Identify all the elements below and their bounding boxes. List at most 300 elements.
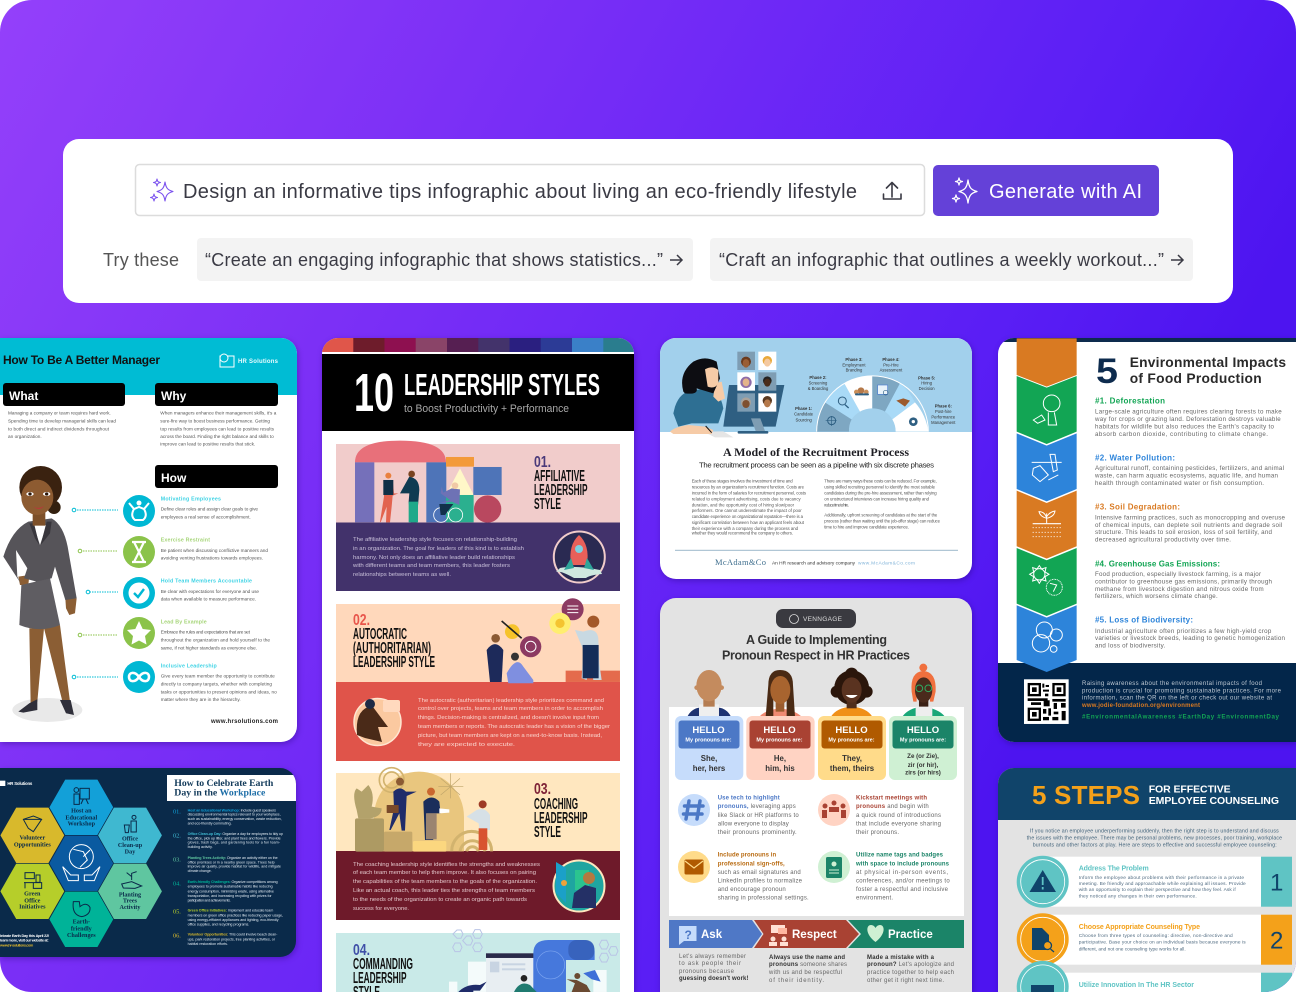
call to action text: Always use the name and bbox=[769, 955, 845, 961]
badge: they: them, theirs bbox=[830, 764, 875, 773]
body column 1: whether they would recommend the company to others. bbox=[692, 530, 793, 536]
tip: tech bbox=[678, 794, 799, 836]
impact 5: varieties or livestock breeds, leading to genetic homogenization bbox=[1095, 635, 1286, 642]
step 2: 2 bbox=[1270, 928, 1283, 954]
section: How: How bbox=[161, 471, 187, 485]
icon: people with flag bbox=[769, 925, 788, 946]
body column 1: Each of these stages involves the investment of time and bbox=[692, 478, 793, 483]
list items: discussing environmental topics relevant to your workplace, bbox=[188, 813, 281, 817]
heading bbox=[1096, 352, 1286, 391]
panel: How to Celebrate Earth Day in the Workplace bbox=[0, 768, 296, 957]
phase labels: Management bbox=[931, 420, 956, 425]
badge: she: She, bbox=[701, 754, 717, 763]
style 04: Commanding bbox=[336, 930, 620, 992]
tip: Inclusive Leadership: directly to company targets, whether with completing bbox=[161, 682, 272, 686]
icon: upload bbox=[884, 182, 901, 199]
list numbers: 02. bbox=[173, 833, 181, 840]
list items: such as sustainability, energy conservation, waste reduction, bbox=[188, 817, 282, 821]
step 1 bbox=[1017, 856, 1292, 908]
step 1: meeting. Be friendly and approachable while explaining all issues. Provide bbox=[1079, 881, 1246, 887]
hexagon labels: Challenges bbox=[67, 933, 96, 939]
list numbers: 04. bbox=[173, 881, 181, 888]
title: STYLE bbox=[534, 496, 561, 513]
body text: The autocratic (authoritarian) leadership style prioritizes command and bbox=[418, 698, 604, 704]
call to action text bbox=[679, 954, 954, 984]
impact 3: decreased agricultural productivity over time. bbox=[1095, 536, 1231, 544]
tip: Exercise Restraint: Be patient when discussing conflictive manners and bbox=[161, 548, 268, 553]
footer: McAdam&Co bbox=[715, 557, 766, 567]
tip: Motivating Employees: employees a real sense of accomplishment. bbox=[161, 514, 251, 520]
impact 1: habitats for wildlife but also reduces the Earth's capacity to bbox=[1095, 424, 1275, 430]
section: What: What bbox=[9, 389, 38, 403]
call to action text: to ask people their bbox=[679, 961, 741, 967]
call to action text: Let's always remember bbox=[679, 954, 746, 960]
badge: they: They, bbox=[842, 754, 862, 763]
intro text: the issues with the employee. There may be personal problems, new processes, poor training, workplace bbox=[1027, 836, 1282, 842]
icon: desk bbox=[24, 873, 42, 888]
section: What: Managing a company or team requires hard work. bbox=[8, 410, 111, 416]
tip: sign-offs: LinkedIn profiles to normalize bbox=[718, 878, 803, 884]
tip: name tags: environment. bbox=[856, 896, 893, 902]
body column 1: performers. One cannot underestimate the impact of poor bbox=[692, 508, 802, 513]
title: 02. bbox=[353, 612, 370, 629]
tip: Motivating Employees: Motivating Employees bbox=[161, 496, 221, 502]
tip: tech: pronouns, leveraging apps bbox=[718, 804, 796, 810]
body text: The coaching leadership style identifies the strengths and weaknesses bbox=[353, 862, 540, 868]
impact 2 bbox=[1094, 454, 1284, 487]
title band: LEADERSHIP STYLES bbox=[404, 368, 600, 402]
panel: 5 Steps for Effective Employee Counseling bbox=[998, 768, 1296, 992]
suggestion chip 1 bbox=[197, 238, 693, 281]
title: 04. bbox=[353, 942, 370, 959]
prompt input box bbox=[136, 164, 924, 216]
hexagon labels: Office bbox=[122, 836, 138, 842]
step 1: they noticed any changes in their own performance. bbox=[1079, 894, 1197, 900]
impact 3 bbox=[1095, 502, 1286, 544]
body column 2: using skilled recruiting personnel to identify the most suitable bbox=[824, 484, 936, 489]
tip: sign-offs: and encourage pronoun bbox=[718, 887, 786, 893]
icon: flexed arm bbox=[73, 902, 90, 917]
list items: energy consumption, minimizing waste, using alternative bbox=[188, 889, 274, 893]
hexagon diagram bbox=[0, 779, 162, 947]
icon: planting hand bbox=[122, 872, 142, 888]
phase labels: Phase 3: bbox=[845, 357, 863, 362]
body text bbox=[352, 537, 524, 578]
panel: AI prompt bbox=[63, 139, 1233, 303]
impact 3: structure. This leads to soil erosion, loss of soil fertility, and bbox=[1095, 529, 1273, 536]
body column 1: resources by an organization's recruitment function. Costs are bbox=[692, 484, 805, 489]
heading bbox=[1032, 780, 1279, 810]
list numbers: 05. bbox=[173, 909, 181, 916]
body text: relationships between teams as well. bbox=[353, 572, 451, 578]
logo: HR Solutions bbox=[220, 354, 279, 367]
step 2: Choose Appropriate Counseling Type bbox=[1079, 924, 1200, 931]
phase labels: Pre-Hire bbox=[883, 362, 899, 367]
impact 1 bbox=[1094, 396, 1282, 438]
title: 03. bbox=[534, 781, 551, 798]
phase labels: Phase 5: bbox=[918, 375, 935, 380]
body text: in an organization. The goal for leaders of this kind is to establish bbox=[353, 546, 524, 552]
suggestion chip 2 bbox=[710, 238, 1193, 281]
impact 1: absorb carbon dioxide, contributing to climate change. bbox=[1095, 431, 1268, 438]
hexagon labels: Day bbox=[125, 849, 136, 855]
list items: the office, pick up litter, and plant trees and flowers. Provide bbox=[188, 836, 281, 840]
heading: EMPLOYEE COUNSELING bbox=[1149, 795, 1279, 807]
list items: participation and achievements. bbox=[188, 898, 231, 902]
tip: name tags: with space to include pronouns bbox=[855, 862, 950, 868]
subheading: The recruitment process can be seen as a pipeline with six discrete phases bbox=[699, 460, 934, 470]
call to action text: of their identity. bbox=[769, 978, 824, 984]
tip: Inclusive Leadership: Inclusive Leadership bbox=[161, 664, 217, 670]
tip: name tags bbox=[818, 851, 950, 902]
badge: they bbox=[818, 716, 886, 780]
body text: team members or reports. The autocratic leader has a vision of the bigger bbox=[418, 724, 610, 730]
icon: biodiversity bubbles bbox=[1032, 622, 1062, 652]
tip: tech: Use tech to highlight bbox=[718, 796, 780, 802]
hexagon labels: Host an bbox=[71, 809, 92, 815]
tip: meetings: a quick round of introductions bbox=[856, 813, 941, 819]
call to action text: guessing doesn't work! bbox=[679, 976, 748, 982]
body column 2 bbox=[824, 478, 941, 530]
tip: name tags: foster a respectful and inclusive bbox=[856, 887, 949, 893]
badge: ze: HELLO bbox=[907, 725, 939, 736]
call to action bbox=[0, 934, 49, 947]
body text: success for everyone. bbox=[353, 906, 409, 912]
hexagon labels: Initiatives bbox=[19, 904, 46, 910]
body text: harmony. Not only does an affiliative leader build relationships bbox=[353, 555, 515, 561]
step 2: Choose from three types of counseling: directive, non-directive and bbox=[1079, 933, 1233, 939]
body text: The affiliative leadership style focuses on relationship-building bbox=[353, 537, 517, 543]
section: How bbox=[155, 465, 278, 488]
title: STYLE bbox=[534, 824, 561, 841]
title box bbox=[167, 775, 296, 801]
title: 01. bbox=[534, 454, 551, 471]
heading: 5 STEPS bbox=[1032, 780, 1140, 810]
footer note: #EnvironmentalAwareness #EarthDay #EnvironmentDay bbox=[1082, 714, 1280, 720]
impact 4: fertilizers, which worsens climate change. bbox=[1095, 593, 1218, 600]
heading: Environmental Impacts bbox=[1130, 355, 1286, 370]
suggestion chip 1: “Create an engaging infographic that shows statistics...” bbox=[205, 250, 663, 270]
list items: members on green office practices like reducing paper usage, bbox=[188, 913, 283, 917]
badge: they: HELLO bbox=[835, 725, 868, 736]
suggestion chip 2: “Craft an infographic that outlines a weekly workout...” bbox=[719, 250, 1164, 270]
badge: he: My pronouns are: bbox=[756, 738, 803, 744]
title band: to Boost Productivity + Performance bbox=[404, 403, 569, 415]
section: What bbox=[3, 383, 125, 439]
badge: she: My pronouns are: bbox=[685, 738, 732, 744]
list items: office premises or in a nearby green space. Trees help bbox=[188, 860, 275, 864]
body text bbox=[353, 862, 540, 912]
call to action text: with us and be respectful bbox=[768, 970, 842, 976]
title bbox=[534, 783, 588, 837]
heading: FOR EFFECTIVE bbox=[1149, 784, 1231, 796]
phase labels: Post-hire bbox=[935, 409, 952, 414]
icon: heart bbox=[867, 925, 884, 942]
website: www.hrsolutions.com bbox=[210, 719, 278, 725]
badge: ze: zir (or hir), bbox=[908, 762, 939, 769]
section: Why bbox=[155, 383, 278, 446]
tip: name tags: at physical in-person events, bbox=[856, 870, 948, 876]
list items: gloves, trash bags, and gardening tools for a fun team- bbox=[188, 841, 281, 845]
list items: climate change. bbox=[188, 869, 212, 873]
body column 1: duration, and the opportunity cost of hiring slow/poor bbox=[692, 502, 795, 507]
intro text bbox=[1027, 828, 1282, 848]
badge: ze: zirs (or hirs) bbox=[905, 770, 941, 776]
tip: Exercise Restraint: Exercise Restraint bbox=[161, 538, 210, 544]
tip: meetings: their pronouns. bbox=[856, 830, 899, 836]
tip: sign-offs: such as email signatures and bbox=[718, 870, 801, 876]
heading: How To Be A Better Manager bbox=[3, 353, 160, 367]
phase labels: Screening bbox=[809, 381, 828, 386]
panel: Pronoun Respect guide bbox=[660, 598, 972, 992]
colour stripe bbox=[322, 338, 634, 352]
title: LEADERSHIP bbox=[534, 482, 588, 499]
tip: Exercise Restraint bbox=[78, 536, 268, 568]
impact 5 bbox=[1095, 616, 1286, 650]
panel: A Model of the Recruitment Process bbox=[660, 338, 972, 579]
badge: ze: Ze (or Zie), bbox=[907, 753, 939, 760]
body column 1: significant correlation between how an applicant feels about bbox=[692, 520, 805, 525]
badge: they: My pronouns are: bbox=[828, 738, 875, 744]
tip: Hold Team Members Accountable: Hold Team Members Accountable bbox=[161, 578, 252, 584]
badge: he: him, his bbox=[765, 764, 795, 773]
illustration: mentor scene bbox=[354, 768, 492, 852]
body text: of each team member to help them improve. It also focuses on pairing bbox=[353, 870, 536, 876]
icon: sparkle bbox=[150, 179, 173, 201]
heading: Pronoun Respect in HR Practices bbox=[722, 648, 910, 662]
try these label: Try these bbox=[103, 250, 179, 270]
prompt text: Design an informative tips infographic about living an eco-friendly lifestyle bbox=[183, 181, 857, 203]
list items: Planting Trees Activity: Organize an activity either on the bbox=[188, 856, 278, 860]
hexagon labels: Workshop bbox=[68, 822, 96, 828]
impact 4: Food production, especially livestock farming, is a major bbox=[1095, 571, 1261, 578]
hexagon labels: friendly bbox=[71, 927, 93, 933]
name badges bbox=[675, 716, 957, 780]
phase labels: Phase 1: bbox=[795, 406, 812, 411]
title bbox=[353, 614, 435, 667]
illustration: blueprint scene bbox=[449, 930, 618, 992]
impact 2: #2. Water Pollution: bbox=[1095, 454, 1175, 462]
title bbox=[534, 456, 588, 509]
body column 2: Additionally, upfront screening of candidates at the start of the bbox=[824, 512, 938, 518]
tip: Lead By Example: same, if not higher standards as everyone else. bbox=[161, 646, 257, 650]
body column 2: process (rather than waiting until the job-offer stage) can reduce bbox=[824, 518, 941, 524]
body column 2: There are many ways these costs can be reduced. For example, bbox=[824, 478, 937, 483]
title: LEADERSHIP bbox=[353, 970, 407, 987]
footer: An HR research and advisory company bbox=[772, 560, 856, 566]
panel: How To Be A Better Manager bbox=[0, 338, 297, 742]
step 2: different, and not one counseling type works for all. bbox=[1079, 946, 1186, 952]
tip: Lead By Example: throughout the organization and hold yourself to the bbox=[161, 638, 270, 642]
panel: 10 Leadership Styles bbox=[322, 338, 634, 992]
badge: Venngage bbox=[776, 609, 856, 628]
body column 2: time to hire and improve candidate experience. bbox=[824, 524, 909, 530]
list items: Earth-friendly Challenges: Organize competitions among bbox=[188, 880, 278, 884]
step 1: Address The Problem bbox=[1079, 866, 1149, 873]
body column 1: candidate experience on organizational reputation—there is a bbox=[692, 514, 804, 519]
phase labels: Performance bbox=[931, 415, 956, 420]
chart: recruitment pipeline half donut bbox=[794, 357, 956, 432]
body text: with different teams and team members, this leader fosters bbox=[352, 563, 510, 569]
impact 1: #1. Deforestation bbox=[1095, 396, 1165, 406]
list numbers: 06. bbox=[173, 933, 181, 940]
impact 5: and loss of biodiversity. bbox=[1095, 642, 1166, 650]
section: What: Spending time to develop managerial skills can lead bbox=[8, 418, 116, 424]
impact 2: health through contaminated water or fish consumption. bbox=[1095, 480, 1264, 487]
style 01: Affiliative bbox=[336, 441, 620, 591]
list items bbox=[188, 808, 283, 946]
hexagon labels bbox=[14, 809, 143, 939]
call to action: www.hr-solutions.com bbox=[0, 943, 34, 947]
tip: Exercise Restraint: avoiding venting frustrations towards employees. bbox=[161, 556, 263, 560]
list items: ups, park restoration projects, tree planting activities, or bbox=[188, 937, 276, 941]
tip: Inclusive Leadership: matter where they are in the hierarchy. bbox=[161, 697, 241, 702]
list numbers bbox=[173, 808, 181, 940]
phase labels: Candidate bbox=[794, 412, 814, 417]
impact 3: #3. Soil Degradation: bbox=[1095, 502, 1180, 512]
illustration: shapes and people bbox=[355, 441, 502, 523]
tip: Lead By Example: Embrace the rules and expectations that are set bbox=[161, 630, 251, 634]
body text: Like an actual coach, this leader ties the strengths of team members bbox=[353, 888, 535, 894]
step 2 bbox=[1017, 913, 1292, 965]
hexagon labels: Green bbox=[24, 892, 41, 898]
tip: Motivating Employees: Define clear roles and assign clear goals to give bbox=[161, 506, 258, 512]
body column 1: their experience with a company during the process and bbox=[692, 526, 799, 531]
step 3 bbox=[1017, 961, 1292, 992]
tip: meetings bbox=[818, 794, 941, 836]
tip: meetings: that include everyone sharing bbox=[856, 822, 941, 828]
tip: Inclusive Leadership: Give every team member the opportunity to contribute bbox=[161, 674, 275, 678]
impact 4: #4. Greenhouse Gas Emissions: bbox=[1095, 560, 1220, 568]
QR code bbox=[1024, 679, 1069, 724]
title: COACHING bbox=[534, 796, 578, 813]
body column 2: on unstructured interviews can increase hiring quality and bbox=[824, 496, 930, 501]
list items: building activity. bbox=[188, 845, 213, 849]
badge: he: He, bbox=[774, 754, 786, 763]
title: LEADERSHIP STYLE bbox=[353, 654, 435, 671]
body column 2: reduce time to hire. bbox=[824, 502, 849, 507]
body text: the capabilities of the team members to the goals of the organization. bbox=[353, 879, 537, 885]
logo: HR Solutions: HR Solutions bbox=[7, 781, 33, 786]
section: Why: sure-fire way to boost business performance. Getting bbox=[160, 418, 270, 424]
body text: things. Decision-making is centralized, and doesn't involve input from bbox=[418, 715, 599, 721]
section: Why: across the board. Finding the right balance and skills to bbox=[160, 434, 274, 439]
icon: sparkle white bbox=[952, 178, 977, 203]
impact 5: Industrial agriculture often prioritizes a few high-yield crop bbox=[1095, 628, 1272, 635]
title band bbox=[322, 354, 634, 431]
chevron column with icons bbox=[1017, 338, 1077, 672]
tip: tech: allow everyone to display bbox=[718, 822, 789, 828]
illustration: four people bbox=[687, 664, 945, 717]
impact 4: contributor to greenhouse gas emissions, primarily through bbox=[1095, 578, 1273, 586]
body column 1: incurred in the form of salaries for recruitment personnel, costs bbox=[692, 490, 806, 495]
list numbers: 01. bbox=[173, 808, 181, 815]
badge: leader bbox=[354, 698, 401, 746]
call to action text: other get it right next time. bbox=[867, 978, 944, 984]
heading bbox=[722, 633, 910, 662]
footer note: Raising awareness about the environmental impacts of food bbox=[1082, 681, 1262, 687]
tip: name tags: conferences, and/or meetings to bbox=[856, 878, 950, 884]
tip: Inclusive Leadership: tasks or opportunities to present opinions and ideas, no bbox=[161, 690, 277, 694]
impact 4: methane from livestock digestion and nitrous oxide from bbox=[1095, 586, 1264, 593]
title bbox=[353, 942, 413, 992]
tip: Hold Team Members Accountable: Be clear with expectations for everyone and use bbox=[161, 589, 259, 594]
badge: she: her, hers bbox=[693, 764, 726, 773]
call to action text: pronoun? Let's apologize and bbox=[867, 962, 954, 968]
list numbers: 03. bbox=[173, 856, 181, 863]
tip: Lead By Example: Lead By Example bbox=[161, 620, 207, 626]
badge: rocket bbox=[554, 532, 605, 582]
tip: Inclusive Leadership bbox=[72, 661, 277, 702]
phase labels: Assessment bbox=[880, 368, 903, 373]
badge: ze: My pronouns are: bbox=[900, 738, 946, 744]
badge: she: HELLO bbox=[692, 725, 725, 736]
phase labels: & Boarding bbox=[808, 386, 829, 391]
banner: Ask Respect Practice bbox=[669, 920, 964, 948]
tip: meetings: pronouns and begin with bbox=[856, 804, 929, 810]
tip: Hold Team Members Accountable: data when available to measure performance. bbox=[161, 596, 256, 602]
heading: 5 bbox=[1096, 352, 1118, 391]
list items: transportation, and increasing recycling with prizes for bbox=[188, 894, 272, 898]
title box: How to Celebrate Earth bbox=[174, 778, 274, 789]
impact 1: way for crops or grazing land. Deforestation destroys valuable bbox=[1094, 416, 1281, 423]
icon: polluted water bbox=[1032, 454, 1062, 482]
intro text: burnouts and other factors at play. Here are steps to effective and successful employee counseling: bbox=[1033, 842, 1277, 848]
call to action text: pronouns someone shares bbox=[769, 962, 847, 968]
title box: Day in the Workplace bbox=[174, 788, 266, 799]
list items: Green Office Initiatives: Implement and educate team bbox=[188, 909, 273, 913]
body column 1: related to employment advertising, costs due to vacancy bbox=[692, 496, 802, 501]
badge: she bbox=[675, 716, 743, 780]
step 2: participative. Base your choice on an individual basis because everyone is bbox=[1079, 940, 1246, 946]
footer bbox=[675, 550, 958, 567]
section: Why: When managers enhance their management skills, it's a bbox=[160, 410, 277, 416]
icon: globe in hands bbox=[63, 845, 100, 881]
tip: sign-offs: Include pronouns in bbox=[718, 852, 777, 858]
banner: Ask Respect Practice: Respect bbox=[792, 929, 837, 941]
body column 2: candidates during the pre-hire assessment, rather than relying bbox=[824, 490, 937, 495]
phase labels: Hiring bbox=[921, 381, 933, 386]
tip: Hold Team Members Accountable bbox=[86, 577, 259, 609]
badge: presenter bbox=[554, 860, 604, 912]
intro text: If you notice an employee underperforming suddenly, then the right step is to understand and discuss bbox=[1030, 828, 1279, 834]
title: AUTOCRATIC bbox=[353, 626, 407, 643]
panel: Environmental Impacts of Food Production bbox=[998, 338, 1296, 742]
hexagon labels: Planting bbox=[119, 892, 142, 898]
step 1: 1 bbox=[1270, 870, 1283, 897]
call to action text: Made a mistake with a bbox=[867, 955, 935, 961]
icon: tree and axe bbox=[1033, 395, 1060, 425]
hexagon labels: Earth- bbox=[73, 920, 90, 926]
icon: question bubble bbox=[679, 926, 696, 945]
hexagon labels: Volunteer bbox=[19, 836, 45, 842]
list items: habitat restoration efforts. bbox=[188, 942, 228, 946]
title: LEADERSHIP bbox=[534, 810, 588, 827]
illustration: woman on video call bbox=[670, 352, 784, 437]
generate button: Generate with AI bbox=[989, 181, 1142, 203]
hexagon labels: Trees bbox=[123, 899, 138, 905]
body text: they are expected to execute. bbox=[418, 742, 515, 748]
list items: employees to promote sustainable habits like reducing bbox=[188, 885, 273, 889]
impact 2: waste, can harm aquatic ecosystems, aquatic life, and human bbox=[1094, 472, 1279, 480]
body column 1 bbox=[692, 478, 806, 536]
impact 2: Agricultural runoff, containing pesticides, fertilizers, and animal bbox=[1095, 465, 1284, 472]
illustration: businesswoman bbox=[3, 466, 82, 722]
section: Why: improve can lead to positive results that stick. bbox=[160, 442, 255, 446]
phase labels: Phase 4: bbox=[882, 357, 900, 362]
list items: and eco-friendly commuting. bbox=[188, 821, 232, 825]
phase labels: Branding bbox=[846, 368, 863, 373]
